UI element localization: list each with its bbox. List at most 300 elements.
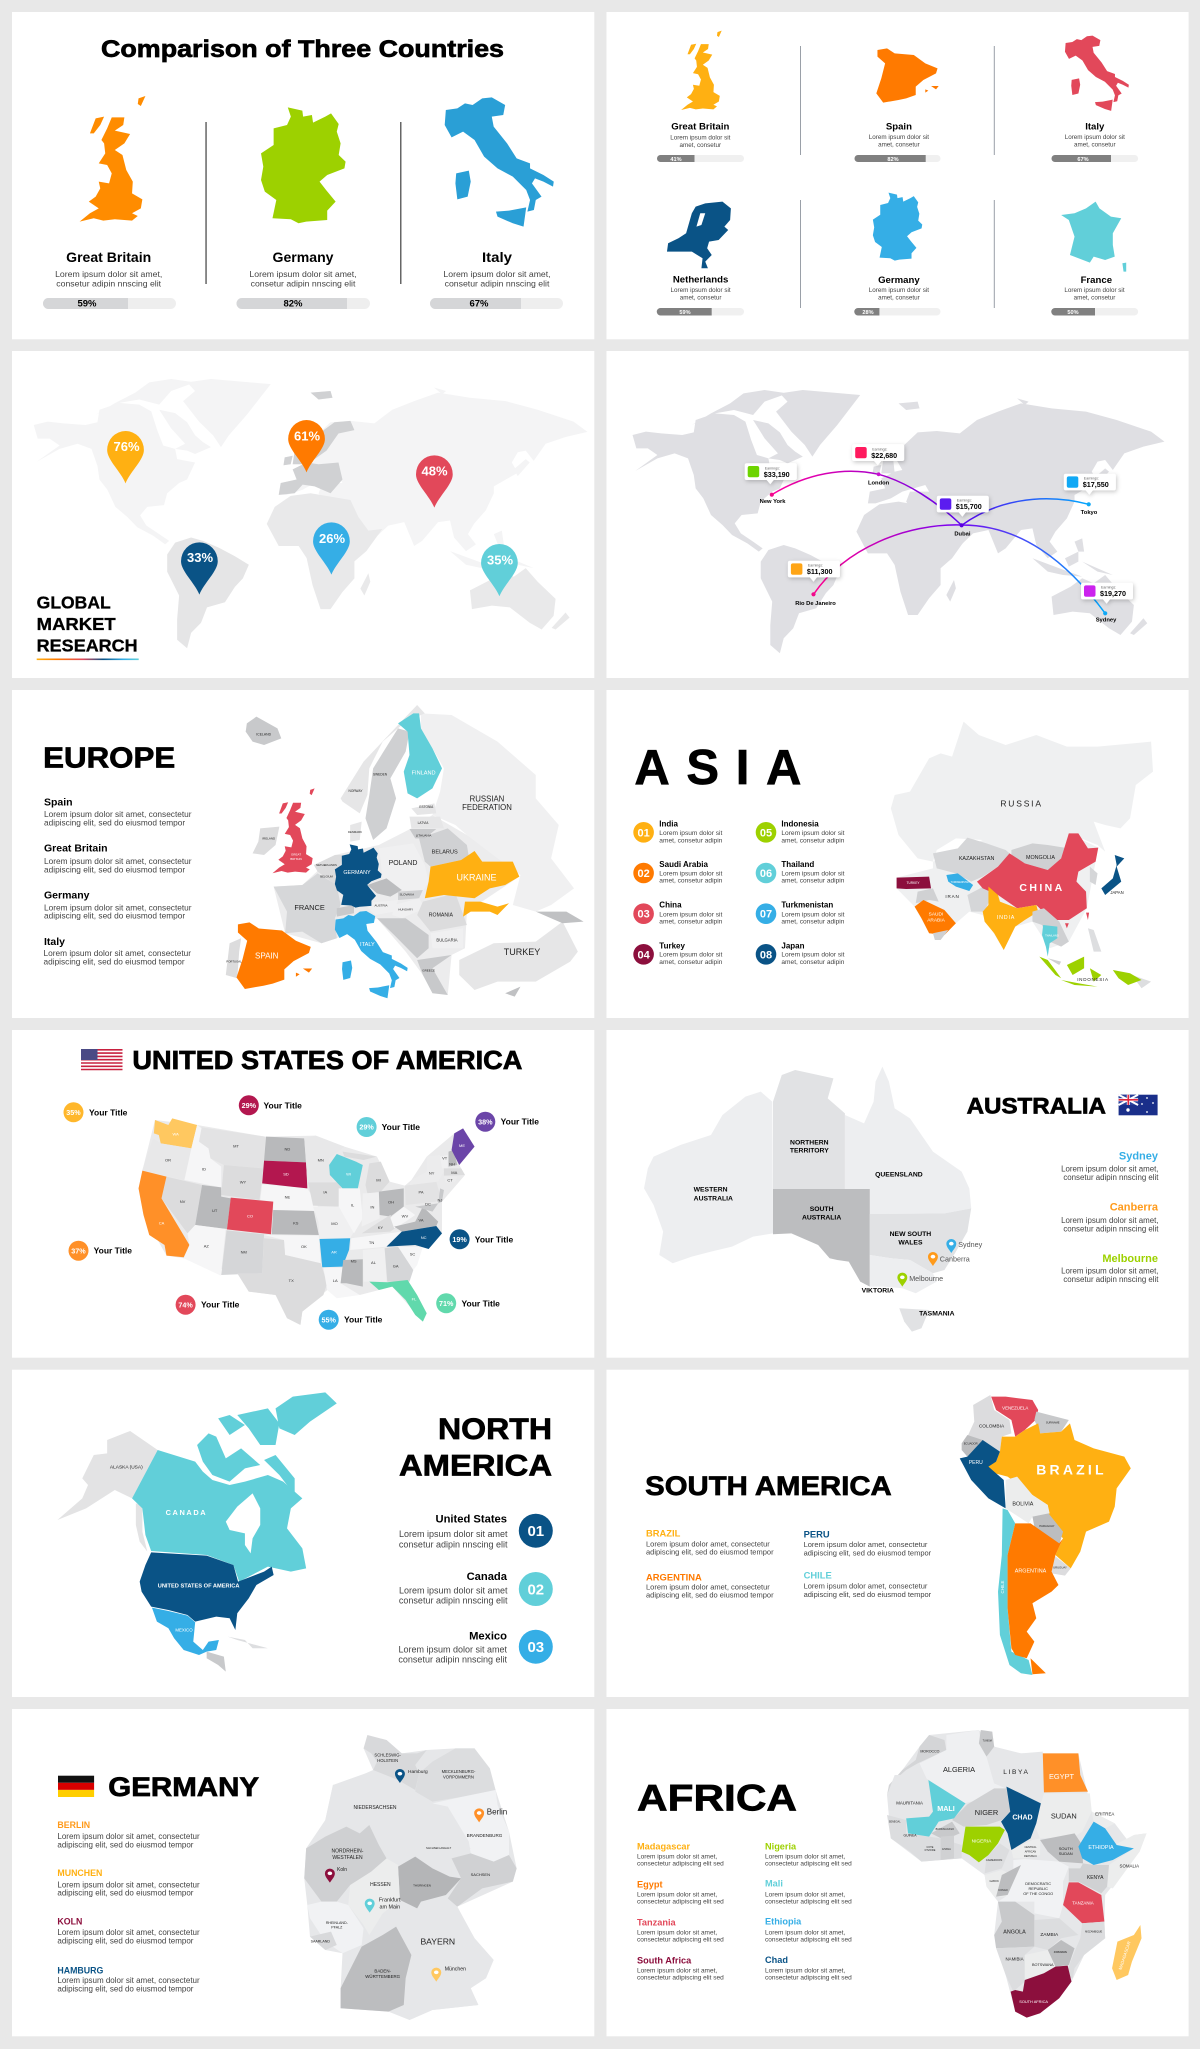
title: Comparison of Three Countries <box>101 36 504 63</box>
map labels: Africa: GHANA <box>942 1848 951 1851</box>
heading: global market research: MARKET <box>37 614 116 634</box>
list: South American countries: Lorem ipsum dolor amet, consectetur <box>804 1540 928 1549</box>
list: African countries: Lorem ipsum dolor sit amet, <box>765 1891 845 1898</box>
map: Germany <box>261 107 346 223</box>
map labels: Europe: LATVIA <box>418 821 429 825</box>
list: South American countries: BRAZIL <box>646 1528 681 1539</box>
list: numbered countries: Turkey <box>659 941 685 950</box>
callout: 74%: 74% <box>178 1300 193 1309</box>
list: numbered countries: Thailand <box>781 860 814 869</box>
card: London earnings: $22,680 <box>871 451 897 460</box>
list: numbered countries: 02 <box>637 868 650 880</box>
card: Dubai earnings <box>937 496 989 517</box>
map pins with percentages: 76% <box>113 439 140 454</box>
list: numbered countries: 07 <box>760 909 772 921</box>
map labels: states <box>694 1139 955 1317</box>
list: numbered countries: amet, consetur adipin <box>659 959 723 966</box>
city labels: London <box>868 480 890 486</box>
list: African countries: Lorem ipsum dolor sit amet, <box>765 1853 845 1860</box>
map labels: Africa: NIGERIA <box>972 1838 992 1844</box>
map labels: state codes: WA <box>173 1132 179 1137</box>
item: France: 50% <box>1067 310 1079 316</box>
column: Germany: consetur adipin nnscing elit <box>251 278 356 288</box>
map labels: Africa: SOUTH <box>1059 1846 1073 1851</box>
panel: North America <box>12 1370 594 1697</box>
map pins: cities: Canberra <box>940 1255 970 1264</box>
panel: United States of America <box>12 1030 594 1358</box>
list: South American countries: adipiscing elit, sed do eiusmod tempor <box>646 1548 774 1557</box>
map labels: German states and cities: HOLSTEIN <box>377 1758 398 1763</box>
item: United States: Lorem ipsum dolor sit amet <box>399 1529 508 1539</box>
map labels: states: TASMANIA <box>919 1310 955 1317</box>
map labels: Africa: TUNISIA <box>983 1740 992 1742</box>
item: Italy: amet, consetur <box>1074 142 1116 148</box>
map labels: Africa: TANZANIA <box>1072 1901 1094 1906</box>
map pins with percentages: 61% <box>294 428 320 444</box>
map labels: state codes: NH <box>449 1161 455 1166</box>
map labels: South America: BRAZIL <box>1036 1462 1107 1478</box>
icon: US flag <box>81 1049 122 1070</box>
city labels: New York <box>760 499 786 505</box>
map labels: German states and cities: NORDRHEIN- <box>332 1848 364 1854</box>
list: African countries: consectetur adipiscing elit sed <box>637 1937 724 1944</box>
map: US states <box>139 1118 475 1325</box>
list: countries: adipiscing elit, sed do eiusmod tempor <box>44 911 185 921</box>
map labels: Europe: BULGARIA <box>436 938 458 942</box>
heading: global market research: RESEARCH <box>37 636 138 656</box>
map labels: state codes: OH <box>388 1199 394 1204</box>
list: countries: Lorem ipsum dolor sit amet, consectetur <box>44 902 192 912</box>
map labels: Asia: SAUDI <box>929 912 943 918</box>
map labels: Africa: MADAGASCAR <box>1118 1941 1132 1970</box>
map labels: Africa: ERITREA <box>1095 1812 1114 1816</box>
item: Spain: Spain <box>886 122 912 132</box>
card: Sydney earnings: Earnings: <box>1101 586 1116 590</box>
map labels: states: WESTERN <box>694 1187 728 1194</box>
map labels: German states and cities: PFALZ <box>331 1926 343 1930</box>
route arcs <box>772 471 1105 613</box>
list: German cities: HAMBURG <box>57 1965 103 1975</box>
list: German cities: Lorem ipsum dolor sit amet, consectetur <box>57 1976 200 1985</box>
column: Great Britain: Great Britain <box>66 249 151 265</box>
map labels: state codes: VA <box>418 1217 424 1222</box>
callout: 29% teal: 29% <box>359 1123 374 1132</box>
callout: 19%: 19% <box>452 1235 467 1244</box>
item: Germany: Lorem ipsum dolor sit <box>869 287 929 294</box>
item: France: France <box>1081 275 1112 286</box>
title: GERMANY <box>108 1772 259 1802</box>
map labels: Europe: ROMANIA <box>429 912 454 918</box>
map labels: state codes: FL <box>412 1296 417 1301</box>
callout: 38% <box>475 1112 539 1132</box>
column: Germany: Lorem ipsum dolor sit amet, <box>249 269 357 279</box>
list: African countries: Lorem ipsum dolor sit amet, <box>637 1967 717 1974</box>
callout: 35% <box>64 1102 128 1122</box>
item: Canada: Canada <box>467 1571 508 1583</box>
list: Australian cities: consetur adipin nnscing elit <box>1063 1224 1159 1233</box>
map pins with percentages: 48% <box>421 464 448 478</box>
column: Italy: Lorem ipsum dolor sit amet, <box>443 269 551 279</box>
map labels: state codes: NJ <box>438 1197 442 1202</box>
list: African countries: Lorem ipsum dolor sit amet, <box>637 1891 717 1898</box>
map labels: German states and cities: BAYERN <box>420 1936 455 1946</box>
map labels: state codes: IL <box>351 1202 355 1207</box>
item: United States <box>399 1514 553 1549</box>
card: Tokyo earnings: Earnings: <box>1084 477 1099 481</box>
callout: 19%: Your Title <box>475 1234 513 1244</box>
callout: 35%: 35% <box>66 1108 81 1117</box>
list: African countries: Egypt <box>637 1879 663 1889</box>
list: German cities: adipiscing elit, sed do eiusmod tempor <box>57 1889 194 1898</box>
list: numbered countries: 04 <box>637 949 651 961</box>
list: German cities: adipiscing elit, sed do eiusmod tempor <box>57 1936 194 1945</box>
map labels: South America: ECUADOR <box>964 1442 978 1446</box>
map labels: Africa <box>889 1740 1139 2004</box>
map: Asia <box>891 722 1153 988</box>
map labels: state codes: AR <box>331 1249 337 1254</box>
map labels: Europe: AUSTRIA <box>374 904 388 908</box>
map labels: Africa: CHAD <box>1012 1814 1033 1822</box>
map labels: Asia: JAPAN <box>1110 890 1124 895</box>
map labels: Europe: FEDERATION <box>462 803 512 812</box>
map labels: South America: URUGUAY <box>1053 1566 1067 1570</box>
map labels: state codes: ND <box>285 1146 290 1151</box>
map labels: state codes: MI <box>376 1177 381 1182</box>
world map <box>34 379 587 648</box>
card: Tokyo earnings: $17,550 <box>1083 480 1109 489</box>
list: numbered countries: Lorem ipsum dolor sit <box>781 911 845 918</box>
map labels: Africa: D'IVOIRE <box>925 1849 936 1852</box>
icon: German flag <box>58 1776 94 1797</box>
panel: Germany <box>12 1709 594 2036</box>
map pins with percentages: 35% <box>487 552 513 568</box>
card: Rio earnings <box>788 561 840 582</box>
map labels: state codes: IN <box>370 1204 375 1209</box>
map labels: Africa: AFRICAN <box>1025 1850 1036 1854</box>
map labels: Asia <box>907 798 1124 982</box>
list: numbered countries: amet, consetur adipin <box>659 878 723 885</box>
card: Dubai earnings: $15,700 <box>956 502 982 511</box>
map labels: Europe: HUNGARY <box>398 908 413 912</box>
list: numbered countries: 01 <box>637 827 650 839</box>
list: African countries: Lorem ipsum dolor sit amet, <box>637 1929 717 1936</box>
callout: 37%: Your Title <box>94 1246 132 1256</box>
panel: comparison of three countries <box>12 12 594 339</box>
list: African countries: consectetur adipiscing elit sed <box>765 1937 852 1944</box>
map labels: North America <box>110 1464 239 1632</box>
map labels: Asia: INDIA <box>997 915 1015 921</box>
callout: 55% <box>319 1310 383 1330</box>
map labels: states: WALES <box>898 1239 923 1246</box>
title: ASIA <box>634 741 801 795</box>
column: Italy: 67% <box>469 298 489 310</box>
title: SOUTH AMERICA <box>645 1471 892 1501</box>
callout: 55%: Your Title <box>344 1315 383 1325</box>
map labels: German states and cities: WÜRTTEMBERG <box>365 1974 401 1979</box>
list: German cities: KOLN <box>57 1917 82 1927</box>
list: numbered countries: Lorem ipsum dolor sit <box>659 911 722 918</box>
item: United States: consetur adipin nnscing elit <box>399 1539 508 1549</box>
map labels: state codes: MA <box>451 1170 458 1175</box>
map labels: Europe: FRANCE <box>294 903 325 912</box>
callout: 74%: Your Title <box>201 1300 240 1310</box>
list: numbered countries: amet, consetur adipin <box>781 959 845 966</box>
item: Great Britain: Great Britain <box>671 122 729 132</box>
list: South American countries: Lorem ipsum dolor amet, consectetur <box>646 1582 770 1591</box>
column: Great Britain <box>43 249 176 310</box>
map labels: Africa: ALGERIA <box>943 1765 975 1774</box>
list: African countries: Lorem ipsum dolor sit amet, <box>637 1853 717 1860</box>
map pins: cities <box>897 1239 983 1287</box>
map labels: states: SOUTH <box>810 1206 834 1213</box>
list: Australian cities: Canberra <box>1110 1202 1159 1214</box>
map labels: South America: BOLIVIA <box>1012 1502 1034 1508</box>
map labels: Africa: REPUBLIC <box>1028 1886 1048 1891</box>
map labels: Africa: CONGO <box>998 1889 1008 1892</box>
list: countries <box>44 797 192 966</box>
map labels: state codes: WV <box>402 1213 408 1218</box>
list: numbered countries: amet, consetur adipin <box>659 837 723 844</box>
map labels: Africa: SENEGAL <box>889 1820 901 1824</box>
map labels: Africa: LIBYA <box>1003 1769 1030 1776</box>
item: Mexico: Lorem ipsum dolor sit amet <box>398 1644 507 1654</box>
list: numbered countries: Lorem ipsum dolor sit <box>781 952 845 959</box>
map labels: Europe: BELARUS <box>432 850 458 856</box>
card: London earnings <box>852 444 904 465</box>
map pins with percentages: 33% <box>187 550 213 565</box>
map labels: state codes: MT <box>233 1143 239 1148</box>
column: Great Britain: consetur adipin nnscing elit <box>56 278 162 288</box>
map labels: Africa: ZIMBABWE <box>1054 1951 1067 1954</box>
map labels: state codes: NE <box>285 1194 291 1199</box>
list: German cities: Lorem ipsum dolor sit amet, consectetur <box>57 1928 200 1937</box>
list: countries: Germany <box>44 889 90 901</box>
callout: 37%: 37% <box>71 1246 86 1255</box>
map labels: Africa: MAURITANIA <box>896 1800 923 1806</box>
map labels: Africa: GUINEA <box>904 1834 917 1838</box>
item: Germany: amet, consetur <box>878 294 920 302</box>
map labels: state codes: LA <box>333 1278 338 1283</box>
callout: 19% <box>450 1229 513 1249</box>
list: numbered countries <box>633 820 845 966</box>
list: African countries: Chad <box>765 1955 788 1965</box>
list: South American countries: adipiscing elit, sed do eiusmod tempor <box>646 1591 774 1600</box>
list: German cities: adipiscing elit, sed do eiusmod tempor <box>57 1984 194 1993</box>
map labels: states: QUEENSLAND <box>875 1172 923 1179</box>
icon: Australian flag <box>1119 1095 1158 1115</box>
callout: 38%: Your Title <box>501 1117 539 1127</box>
list: South American countries: adipiscing elit, sed do eiusmod tempor <box>804 1590 932 1599</box>
panel: earnings route map <box>606 351 1189 678</box>
list: South American countries: PERU <box>804 1528 830 1539</box>
item: Canada <box>399 1571 553 1606</box>
map: Europe <box>226 705 584 998</box>
callout: 71% <box>436 1293 500 1313</box>
map labels: state codes: NY <box>429 1170 435 1175</box>
map labels: Africa: KENYA <box>1087 1875 1104 1881</box>
map labels: Europe: GERMANY <box>343 870 371 876</box>
list: German cities: Lorem ipsum dolor sit amet, consectetur <box>57 1832 200 1841</box>
list: Australian cities: consetur adipin nnscing elit <box>1063 1173 1159 1182</box>
list: South American countries: Lorem ipsum dolor amet, consectetur <box>804 1582 928 1591</box>
map labels: Africa: ETHIOPIA <box>1088 1845 1114 1851</box>
map labels: German states and cities: SACHSEN <box>471 1872 490 1877</box>
list: countries: adipiscing elit, sed do eiusmod tempor <box>44 817 185 827</box>
column: Great Britain: 59% <box>77 298 97 310</box>
map labels: South America: VENEZUELA <box>1002 1406 1028 1410</box>
map labels: Asia: THAILAND <box>1045 934 1059 938</box>
item: Germany: 28% <box>862 310 874 316</box>
list: numbered countries: Lorem ipsum dolor sit <box>781 870 845 877</box>
map labels: Africa: SOUTH AFRICA <box>1019 1999 1048 2004</box>
item: Canada: Lorem ipsum dolor sit amet <box>399 1585 508 1595</box>
list: numbered countries: amet, consetur adipin <box>781 837 845 844</box>
panel: global market research <box>12 351 594 678</box>
map labels: Africa: NAMIBIA <box>1005 1956 1024 1962</box>
map labels: state codes: OK <box>301 1244 307 1249</box>
map labels: Europe: POLAND <box>389 860 417 867</box>
map labels: Europe: BRITAIN <box>290 857 302 861</box>
map labels: Africa: DEMOCRATIC <box>1025 1881 1051 1886</box>
item: Germany: Germany <box>878 275 920 286</box>
map labels: Europe: ICELAND <box>256 732 272 736</box>
callout: 35%: Your Title <box>89 1108 128 1118</box>
map labels: Africa: ZAMBIA <box>1040 1932 1059 1938</box>
map labels: Africa: MOZAMBIQUE <box>1085 1930 1103 1934</box>
panel: Australia <box>606 1030 1189 1358</box>
list: numbered countries: Saudi Arabia <box>659 860 708 869</box>
list: African countries: consectetur adipiscing elit sed <box>637 1975 724 1982</box>
map labels: German states and cities: Koln <box>337 1867 347 1873</box>
list: Australian cities: Lorem ipsum dolor sit amet, <box>1061 1165 1158 1174</box>
item: Spain <box>854 122 940 163</box>
map labels: state codes: KS <box>293 1220 299 1225</box>
item: Italy: Lorem ipsum dolor sit <box>1065 134 1125 141</box>
map labels: German states and cities: WESTFALEN <box>332 1855 363 1861</box>
card: Rio earnings: $11,300 <box>807 567 832 576</box>
title <box>399 1413 552 1483</box>
map labels: state codes: MS <box>351 1258 357 1263</box>
item: Mexico: consetur adipin nnscing elit <box>398 1654 507 1664</box>
map labels: state codes: NM <box>241 1249 247 1254</box>
list: African countries: Mali <box>765 1878 783 1888</box>
map labels: Africa: NIGER <box>975 1808 998 1817</box>
callout: 29% crimson <box>239 1095 302 1115</box>
map labels: state codes: ID <box>202 1166 206 1171</box>
map labels: South America: COLOMBIA <box>979 1424 1005 1430</box>
map labels: Africa: ANGOLA <box>1003 1930 1026 1936</box>
map labels: Africa: MALI <box>937 1804 955 1813</box>
map labels: state codes: NV <box>180 1199 186 1204</box>
list: Australian cities <box>1061 1150 1159 1284</box>
map labels: state codes: MN <box>318 1157 324 1162</box>
map labels: Africa: EGYPT <box>1049 1772 1075 1781</box>
map pins with percentages: 26% <box>319 531 345 546</box>
map labels: Europe <box>226 732 540 972</box>
list: South American countries: CHILE <box>804 1570 832 1581</box>
map labels: state codes: TN <box>369 1240 374 1245</box>
callout: 29% crimson: Your Title <box>264 1100 302 1110</box>
map labels: Asia: KAZAKHSTAN <box>959 856 994 862</box>
map labels: South America: ARGENTINA <box>1015 1568 1047 1574</box>
map labels: Africa: COTE <box>927 1846 934 1849</box>
map labels: state codes: GA <box>393 1263 399 1268</box>
item: Spain: 82% <box>887 157 899 163</box>
map labels: Asia: ARABIA <box>927 918 946 924</box>
list: countries: adipiscing elit, sed do eiusmod tempor <box>44 864 185 874</box>
map labels: Europe: ITALY <box>360 942 375 948</box>
callout: 55%: 55% <box>322 1315 336 1324</box>
callout: 37% <box>68 1241 132 1261</box>
list: German cities: MUNCHEN <box>57 1868 102 1878</box>
map labels: state codes: CA <box>159 1220 165 1225</box>
callout: 38%: 38% <box>478 1117 493 1126</box>
map labels: states: AUSTRALIA <box>802 1214 841 1221</box>
list: countries: Lorem ipsum dolor sit amet, consectetur <box>44 948 191 958</box>
map labels: state codes: UT <box>212 1208 218 1213</box>
map labels: Asia: INDONESIA <box>1077 977 1109 982</box>
map labels: state codes: AZ <box>204 1243 209 1248</box>
list: countries: Lorem ipsum dolor sit amet, consectetur <box>44 856 192 866</box>
list: numbered countries: 06 <box>760 868 772 880</box>
map labels: Europe: NORWAY <box>349 789 363 793</box>
list: African countries: Lorem ipsum dolor sit amet, <box>765 1967 845 1974</box>
title: AMERICA <box>399 1450 552 1483</box>
map labels: German states and cities: SACHSEN-ANHALT <box>426 1846 452 1850</box>
callout: 29% teal: Your Title <box>382 1122 420 1132</box>
map labels: German states and cities: Frankfurt <box>379 1898 401 1904</box>
map labels: Europe: GREECE <box>422 968 435 972</box>
card: New York earnings <box>745 463 797 484</box>
map labels: Europe: FINLAND <box>412 770 436 776</box>
item: Netherlands: Netherlands <box>673 274 728 286</box>
map labels: state codes: SD <box>283 1171 289 1176</box>
item: Spain: amet, consetur <box>878 142 920 148</box>
column: Italy: Italy <box>482 249 512 265</box>
list: numbered countries: amet, consetur adipin <box>781 919 845 926</box>
map labels: Africa: CAMEROON <box>986 1858 1002 1862</box>
map labels: South America: PARAGUAY <box>1039 1524 1055 1528</box>
card: Rio earnings: Earnings: <box>808 564 823 568</box>
callout: 71%: 71% <box>439 1299 454 1308</box>
map labels: Europe: SLOVAKIA <box>399 892 414 896</box>
map: South America <box>960 1395 1131 1675</box>
item: Great Britain: amet, consetur <box>679 142 721 149</box>
card: Dubai earnings: Earnings: <box>957 499 972 503</box>
list: Australian cities: Melbourne <box>1102 1253 1158 1265</box>
map labels: state codes: WY <box>240 1179 247 1184</box>
world map <box>633 390 1164 653</box>
map labels: German states and cities: München <box>445 1967 466 1973</box>
map pins: German cities <box>325 1769 484 1982</box>
list: countries: Great Britain <box>44 843 108 855</box>
list: Australian cities: Lorem ipsum dolor sit amet, <box>1061 1267 1158 1276</box>
maps: six country silhouettes <box>667 31 1129 272</box>
map labels: Europe: DENMARK <box>348 830 362 834</box>
panel: Asia <box>606 690 1189 1018</box>
item: Canada: consetur adipin nnscing elit <box>399 1596 508 1606</box>
list: Australian cities: Sydney <box>1119 1150 1159 1162</box>
map labels: Africa: BOTSWANA <box>1032 1963 1054 1967</box>
map labels: Asia: TURKMENISTAN <box>951 881 970 884</box>
map pins: cities: Sydney <box>958 1240 983 1249</box>
list: numbered countries: amet, consetur adipin <box>781 878 845 885</box>
map labels: German states and cities: HESSEN <box>370 1882 391 1888</box>
city labels: Tokyo <box>1081 510 1098 516</box>
map labels: state codes <box>159 1132 465 1301</box>
map labels: Asia: IRAN <box>945 894 960 899</box>
map labels: states: NORTHERN <box>790 1139 829 1146</box>
